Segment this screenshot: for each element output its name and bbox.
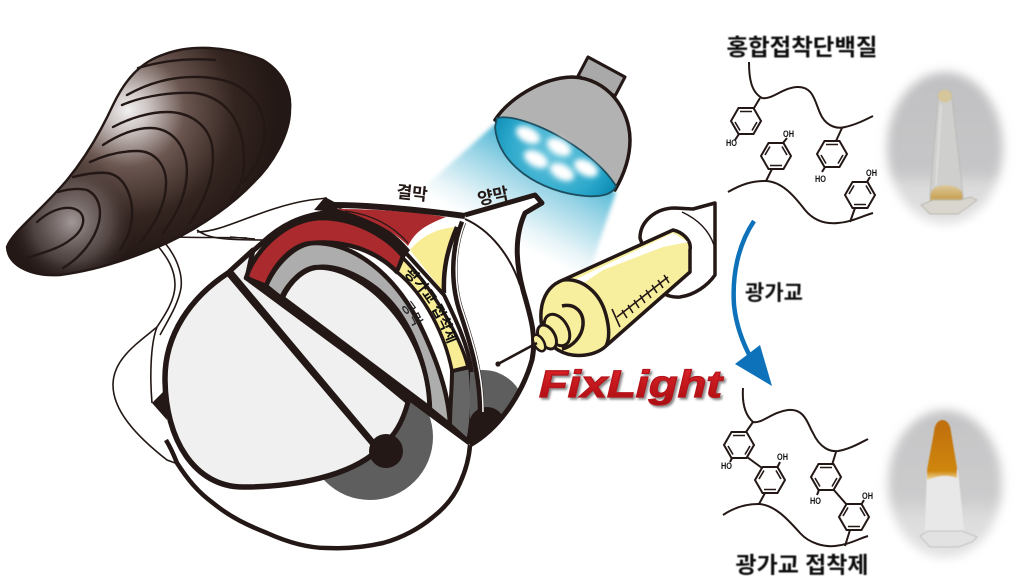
- LED lights: [513, 122, 601, 185]
- lens: [165, 273, 378, 487]
- upper red flap: [337, 209, 446, 246]
- upper yellow wedge: [410, 227, 457, 293]
- bonds bottom: [730, 422, 864, 546]
- label: conjunctiva: 결막: [395, 182, 429, 205]
- hydroxyl labels bottom: HO: [810, 496, 821, 507]
- crosslinked chain 1: [743, 388, 868, 451]
- dimer ring C: [811, 464, 841, 490]
- hydroxyl labels bottom: [721, 452, 873, 507]
- hydroxyl labels bottom: OH: [777, 452, 788, 463]
- crosslinked chain 2: [723, 504, 868, 546]
- dimer ring D: [839, 504, 869, 530]
- syringe barrel: [541, 230, 690, 355]
- nozzle step 1: [539, 310, 575, 350]
- hydroxyl labels top: HO: [726, 138, 737, 149]
- molecule: crosslinked adhesive: [723, 388, 869, 546]
- barrel highlight: [570, 233, 688, 282]
- grey optic disc lower: [307, 374, 433, 500]
- heading: mussel adhesive protein: 홍합접착단백질: [726, 34, 878, 60]
- needle hub tip: [530, 333, 548, 353]
- label: sclera: 공막: [402, 300, 424, 326]
- mussel shell: [7, 48, 290, 275]
- grey disc right: [470, 370, 518, 442]
- photo: tube before crosslinking: [887, 72, 1003, 224]
- lamp dome: [495, 77, 630, 190]
- amniotic flap: [450, 195, 542, 445]
- lamp LED face: [495, 117, 616, 196]
- flap highlight: [476, 204, 528, 219]
- nozzle step 2: [534, 322, 560, 352]
- hydroxyl labels top: OH: [783, 129, 794, 140]
- tyrosine ring 2: [761, 143, 791, 169]
- light beam from lamp: [410, 124, 616, 282]
- black gap under flap: [320, 208, 410, 260]
- tyrosine ring 3: [817, 141, 847, 167]
- liquid sample: [930, 185, 963, 203]
- protein chain 2: [728, 181, 873, 223]
- tube highlight: [936, 105, 941, 185]
- muscle attachment point: [314, 197, 340, 212]
- FixLight logo: FixLight: [541, 366, 726, 408]
- heading: photo-crosslinked adhesive: 광가교 접착제: [736, 553, 868, 578]
- red conjunctiva band: [246, 218, 403, 286]
- label: photo-crosslinked adhesive on band: 광가교 접착제: [405, 267, 459, 344]
- needle: [495, 343, 537, 367]
- eye cross-section: [152, 195, 542, 548]
- thin fold curve: [465, 219, 520, 285]
- tube body: [930, 90, 963, 207]
- amniotic membrane lines: [454, 222, 481, 412]
- pupil dark spot: [369, 434, 403, 468]
- dark band below adhesive: [450, 367, 472, 441]
- hydroxyl labels top: [726, 129, 877, 185]
- protein chain 1: [749, 62, 873, 128]
- scale ticks: [612, 275, 669, 327]
- vitreous wedge: [230, 250, 408, 448]
- label: crosslinking: 광가교: [745, 282, 803, 305]
- barrel front cap: [563, 280, 609, 346]
- connecting bonds: [735, 98, 870, 222]
- amber adhesive: [927, 420, 957, 480]
- flap outline: [465, 195, 542, 445]
- molecule: mussel adhesive protein: [728, 62, 875, 223]
- sclera band: [266, 243, 450, 425]
- hydroxyl labels top: HO: [815, 174, 826, 185]
- outer eyeball outline: [166, 440, 470, 548]
- tube cap: [921, 197, 977, 214]
- hydroxyl labels bottom: OH: [862, 491, 873, 502]
- lamp stem: [578, 57, 625, 96]
- syringe: [495, 203, 715, 367]
- boundary lines: [332, 205, 465, 216]
- thin outlines of the eye socket and muscle: [113, 198, 327, 464]
- FixLight logo: FixLight: [539, 364, 724, 406]
- label: amniotic membrane: 양막: [476, 184, 511, 209]
- tyrosine ring 4: [845, 182, 875, 208]
- plunger highlight: [682, 212, 714, 245]
- inner eye region: [282, 267, 430, 409]
- nozzle collar: [562, 305, 583, 349]
- dimer ring B: [755, 467, 785, 493]
- upper sclera outline: [228, 212, 332, 273]
- tyrosine ring 1: [731, 108, 761, 134]
- black wedge at left: [152, 390, 167, 420]
- curing lamp: [495, 57, 630, 196]
- photo: tube after crosslinking: [888, 410, 1002, 558]
- dimer ring A: [724, 432, 754, 458]
- clear tube: [925, 470, 964, 540]
- hydroxyl labels bottom: HO: [721, 461, 732, 472]
- tube tip: [938, 90, 952, 102]
- flap fold line: [345, 211, 408, 243]
- adhesive yellow strip: [397, 258, 468, 371]
- syringe flange and plunger: [640, 203, 715, 297]
- hydroxyl labels top: OH: [866, 168, 877, 179]
- arrow: photo-crosslinking: [734, 221, 772, 386]
- tube base: [920, 531, 977, 547]
